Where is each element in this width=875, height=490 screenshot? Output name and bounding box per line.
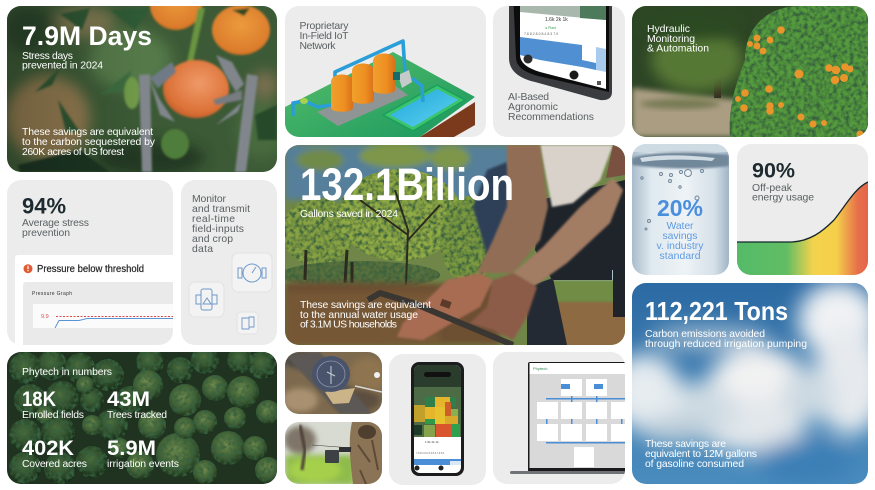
- text: monitor description: and crop: [192, 234, 233, 245]
- chart: pressure graph: [33, 304, 183, 328]
- chart: pressure graph: 9.9: [41, 314, 49, 320]
- text: stress label: Average stress: [22, 218, 89, 229]
- photo: clouds: [632, 283, 868, 484]
- panel: 94% stress prevention: [7, 180, 173, 345]
- text: IoT label: [300, 21, 349, 52]
- text: carbon emissions: through reduced irrigation pumping: [645, 339, 807, 350]
- icon: tomatoes: [124, 0, 270, 159]
- stat: irrigation events: irrigation events: [107, 459, 179, 470]
- text: water savings label: savings: [662, 231, 698, 242]
- text: gasoline equivalent: These savings are: [645, 439, 726, 450]
- text: carbon equivalent: to the carbon sequestered by: [22, 137, 156, 148]
- stat: irrigation events: 5.9M: [107, 437, 156, 460]
- icon: alert: [24, 264, 32, 273]
- text: carbon equivalent: These savings are equivalent: [22, 127, 153, 138]
- panel: in-field IoT network: [285, 6, 486, 145]
- icon: document tile: [237, 312, 258, 334]
- icon: robotic gripper: [139, 55, 258, 172]
- panel: 90% off-peak energy: [737, 144, 868, 275]
- stat: enrolled fields: 18K: [22, 388, 56, 411]
- text: monitor description: field-inputs: [192, 224, 244, 235]
- text: water equivalent: of 3.1M US households: [300, 320, 397, 330]
- text: energy label: Off-peak: [752, 183, 793, 194]
- photo: orange grove: [632, 6, 868, 138]
- heading: 94%: 94%: [22, 194, 66, 218]
- text: stress days: prevented in 2024: [22, 60, 103, 72]
- phone with field map: [411, 362, 464, 476]
- text: stress label: prevention: [22, 228, 70, 239]
- laptop: Phytech: [533, 366, 547, 371]
- stat: enrolled fields: [22, 388, 84, 421]
- panel: 7.9M days stress prevention: [7, 6, 277, 172]
- stat: enrolled fields: Enrolled fields: [22, 410, 84, 421]
- text: carbon emissions: [645, 329, 807, 350]
- photo: farmer hands and drip line: [280, 144, 627, 347]
- text: energy label: energy usage: [752, 192, 814, 204]
- text: water savings label: standard: [660, 251, 701, 262]
- phone mockup: [509, 0, 612, 100]
- text: energy label: [752, 183, 814, 204]
- text: IoT label: In-Field IoT: [300, 31, 349, 42]
- text: gasoline equivalent: of gasoline consumed: [645, 459, 744, 470]
- illustration: irrigation tanks and pool: [285, 41, 475, 145]
- stat: irrigation events: [107, 437, 179, 470]
- text: monitor description: real-time: [192, 214, 235, 225]
- text: hydraulic label: & Automation: [647, 44, 709, 54]
- text: water savings label: [656, 221, 704, 262]
- panel: hydraulic monitoring: [632, 6, 868, 138]
- text: monitor description: data: [192, 244, 213, 255]
- panel: monitor and transmit: [181, 180, 277, 345]
- text: graph title: Pressure Graph: [32, 291, 72, 297]
- text: stress days: [22, 51, 103, 72]
- text: IoT label: Proprietary: [300, 21, 349, 32]
- stat: covered acres: [22, 437, 87, 470]
- phone mockup: 7.8 8.2 8.0 8.4 8.3 7.9: [524, 32, 558, 36]
- text: monitor description: Monitor: [192, 194, 227, 205]
- stat: covered acres: Covered acres: [22, 459, 87, 470]
- text: AI-based label: Recommendations: [508, 112, 594, 123]
- text: gallons saved: Gallons saved in 2024: [300, 209, 398, 220]
- text: water equivalent: These savings are equivalent: [300, 300, 431, 311]
- text: AI-based label: AI-Based: [508, 92, 549, 103]
- text: carbon emissions: Carbon emissions avoided: [645, 329, 765, 340]
- panel: laptop dashboard mockup: [493, 352, 632, 484]
- panel: soil sensor photo: [282, 352, 386, 414]
- text: stress label: [22, 218, 89, 239]
- text: stress days: Stress days: [22, 51, 73, 62]
- text: gasoline equivalent: equivalent to 12M gallons: [645, 449, 757, 460]
- text: section title: Phytech in numbers: [22, 367, 112, 378]
- text: water equivalent: to the annual water usage: [300, 310, 418, 321]
- alert card: pressure below threshold: [15, 255, 173, 345]
- text: carbon equivalent: 260K acres of US forest: [22, 147, 124, 158]
- text: carbon equivalent: [22, 127, 156, 158]
- phone mockup: 1.6k 2k 1k: [545, 17, 568, 23]
- heading: 112,221 Tons: 112,221 Tons: [645, 296, 788, 326]
- text: hydraulic label: Monitoring: [647, 34, 695, 45]
- panel: Phytech in numbers: [7, 346, 281, 484]
- stat: trees tracked: 43M: [107, 388, 150, 411]
- text: AI-based label: [508, 92, 594, 123]
- text: hydraulic label: [647, 24, 709, 54]
- stat: trees tracked: [107, 388, 167, 421]
- photo: forest canopy: [9, 346, 281, 484]
- photo: water glass: [632, 144, 729, 230]
- panel: tree sensor photo: [284, 422, 382, 485]
- phone with field map: 1.6k 2k 1k: [425, 440, 439, 444]
- phone with field map: 7.8 8.2 8.0 8.4 8.3 7.9 8.1: [416, 452, 445, 455]
- heading: 20%: 20%: [657, 195, 703, 221]
- text: water equivalent: [300, 300, 431, 330]
- icon: valve tile: [189, 282, 224, 317]
- text: hydraulic label: Hydraulic: [647, 24, 690, 35]
- stat: covered acres: 402K: [22, 437, 74, 460]
- phone mockup: ● Plant: [545, 26, 556, 30]
- panel: 20% water savings: [632, 144, 729, 275]
- text: monitor description: [192, 194, 250, 255]
- panel: 112,221 tons carbon: [632, 283, 868, 484]
- text: monitor description: and transmit: [192, 204, 250, 215]
- heading: 90%: 90%: [752, 158, 795, 182]
- heading: 7.9M Days: 7.9M Days: [22, 21, 152, 51]
- chart: energy curve: [737, 182, 868, 275]
- text: gasoline equivalent: [645, 439, 757, 470]
- panel: AI-based recommendations: [493, 0, 625, 137]
- stat: trees tracked: Trees tracked: [107, 410, 167, 421]
- text: water savings label: v. industry: [656, 241, 704, 252]
- heading: 132.1Billion: 132.1Billion: [300, 159, 514, 210]
- icon: gauge tile: [232, 253, 272, 292]
- text: water savings label: Water: [666, 221, 694, 232]
- text: AI-based label: Agronomic: [508, 102, 558, 113]
- text: IoT label: Network: [300, 41, 336, 52]
- heading: alert title: Pressure below threshold: [37, 264, 144, 275]
- panel: phone app mockup: [389, 354, 486, 485]
- panel: 132.1 billion gallons: [280, 144, 627, 347]
